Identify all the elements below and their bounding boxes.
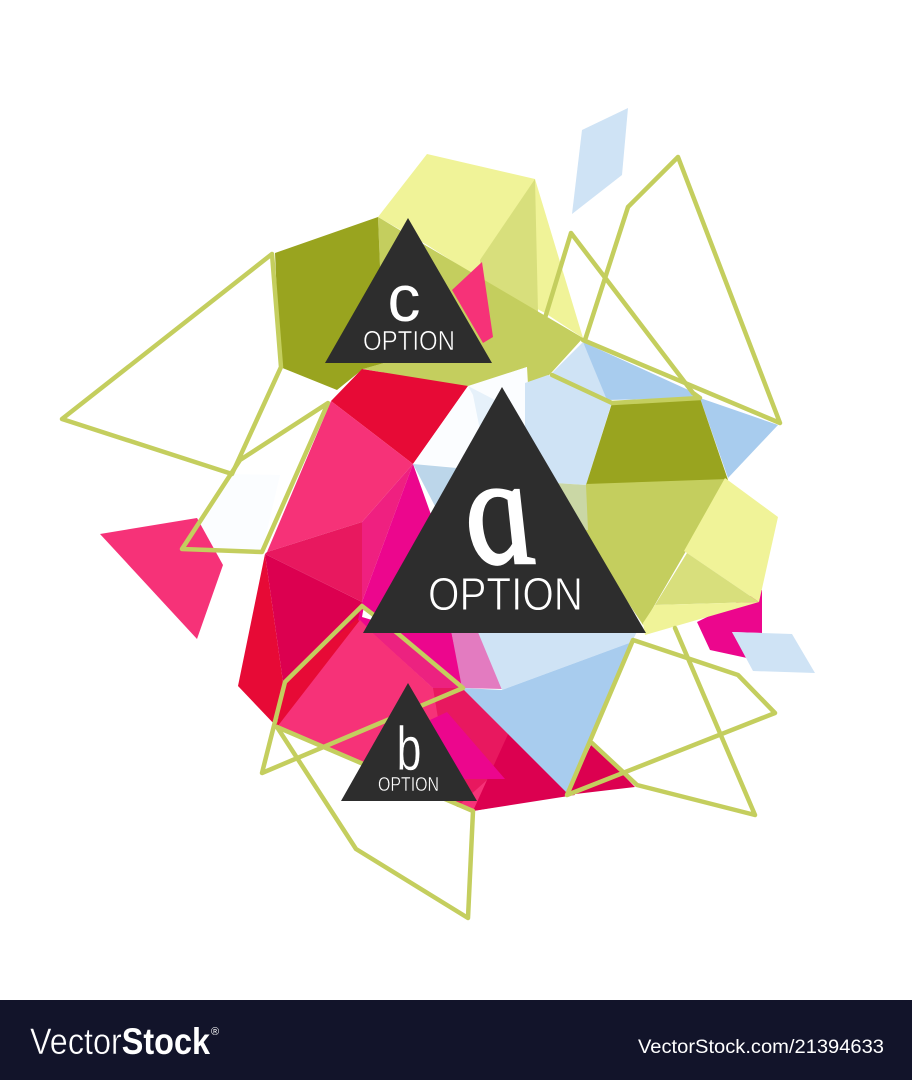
blue facets: right cluster <box>525 342 778 485</box>
badge: option a <box>363 387 646 633</box>
badge: option c: OPTION <box>363 325 455 356</box>
footer logo: VectorStock <box>30 1021 210 1062</box>
badge: option b: OPTION <box>378 774 439 796</box>
red and pink facets: left cluster <box>238 369 635 811</box>
badge: option b <box>341 683 477 801</box>
footer bar: ® <box>211 1026 219 1038</box>
yellow-green facets: top cluster <box>275 154 583 390</box>
footer bar: VectorStock.com/21394633 <box>638 1037 884 1058</box>
blue facets: centre bottom <box>450 625 640 793</box>
footer bar <box>0 1000 912 1080</box>
olive and yellow facets: right cluster <box>555 398 778 658</box>
white and pale blue facets <box>182 367 527 552</box>
badge: option c <box>325 218 492 363</box>
floating shards <box>100 108 815 673</box>
wireframe outlines <box>62 157 780 918</box>
badge: option a: OPTION <box>428 568 583 620</box>
badge: option b: b <box>396 715 422 784</box>
badge: option c: c <box>388 261 420 335</box>
badge: option a: a <box>438 425 553 597</box>
